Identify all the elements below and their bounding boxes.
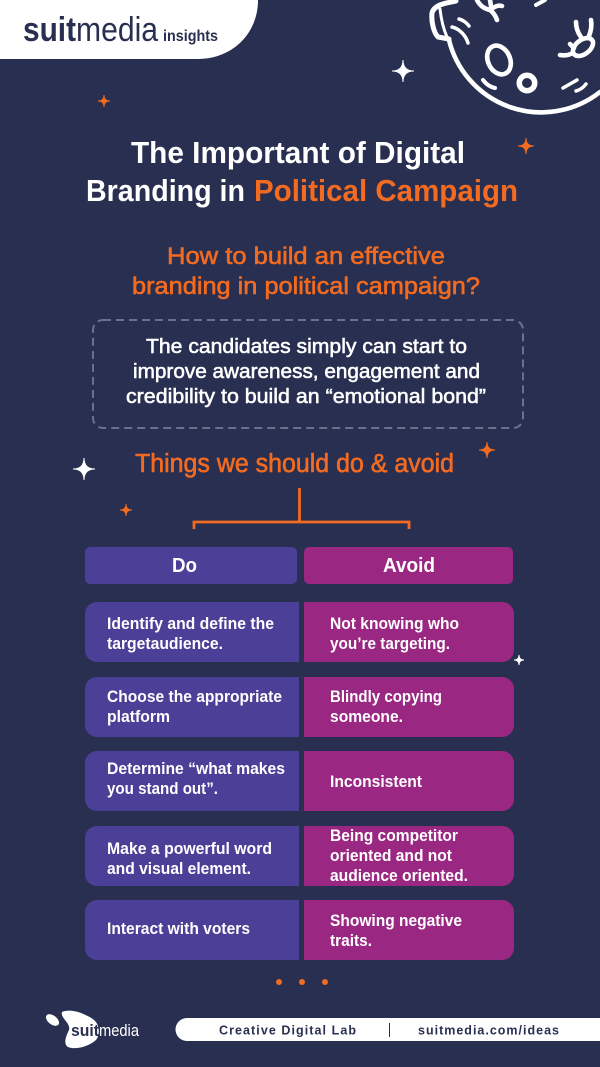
row 1: do: targetaudience. (107, 635, 223, 653)
row 5: avoid: Showing negative (330, 912, 462, 930)
row 1: avoid (304, 602, 514, 662)
column header: avoid: Avoid (383, 554, 435, 577)
row 2: avoid (304, 677, 514, 737)
title: Political Campaign (254, 173, 518, 208)
arrow: bracket connector (194, 488, 409, 529)
column header: avoid (304, 547, 513, 584)
subheading question (132, 243, 480, 300)
callout: emotional bond (93, 320, 523, 428)
row 4: avoid: audience oriented. (330, 867, 468, 885)
row 5: do: Interact with voters (107, 920, 250, 938)
callout: emotional bond: improve awareness, engagement and (133, 360, 480, 383)
row 1: avoid: you’re targeting. (330, 635, 450, 653)
callout: emotional bond: credibility to build an “emotional bond” (126, 385, 486, 408)
subheading question: branding in political campaign? (132, 273, 480, 300)
row 2: avoid: Blindly copying (330, 688, 442, 706)
row 3: avoid: Inconsistent (330, 773, 422, 791)
footer bar (176, 1018, 600, 1041)
heading: things to do and avoid: Things we should do & avoid (135, 450, 454, 478)
header logo tab (0, 0, 258, 59)
title: The Important of Digital (131, 135, 465, 170)
footer logo: media (99, 1022, 140, 1040)
row 1: do (85, 602, 299, 662)
row 5: do (85, 900, 299, 960)
row 2: do (85, 677, 299, 737)
row 2: do: platform (107, 708, 170, 726)
column header: do: Do (172, 554, 197, 577)
column header: do (85, 547, 297, 584)
header logo tab: media (76, 11, 158, 49)
header logo tab: suit (23, 11, 76, 49)
row 2: avoid: someone. (330, 708, 403, 726)
row 4: avoid: Being competitor (330, 827, 459, 845)
icon: moon illustration (432, 0, 600, 112)
title: Branding in (86, 173, 245, 208)
icon: sparkle stars (73, 60, 534, 665)
footer bar: suitmedia.com/ideas (418, 1024, 559, 1038)
row 1: do: Identify and define the (107, 615, 274, 633)
title (86, 135, 518, 208)
row 1: avoid: Not knowing who (330, 615, 459, 633)
pagination dots (276, 979, 328, 985)
row 5: avoid: traits. (330, 932, 372, 950)
row 3: avoid (304, 751, 514, 811)
row 4: do: Make a powerful word (107, 840, 272, 858)
header logo tab: insights (163, 28, 218, 45)
row 3: do: Determine “what makes (107, 760, 285, 778)
row 2: do: Choose the appropriate (107, 688, 282, 706)
footer logo (44, 1011, 140, 1048)
row 4: avoid: oriented and not (330, 847, 452, 865)
row 3: do (85, 751, 299, 811)
callout: emotional bond: The candidates simply can start to (146, 335, 467, 358)
footer bar: Creative Digital Lab (219, 1024, 356, 1038)
footer logo: suit (71, 1022, 99, 1040)
row 4: do: and visual element. (107, 860, 251, 878)
subheading question: How to build an effective (167, 243, 445, 270)
row 5: avoid (304, 900, 514, 960)
row 3: do: you stand out”. (107, 780, 218, 798)
row 4: do (85, 826, 299, 886)
row 4: avoid (304, 826, 514, 886)
